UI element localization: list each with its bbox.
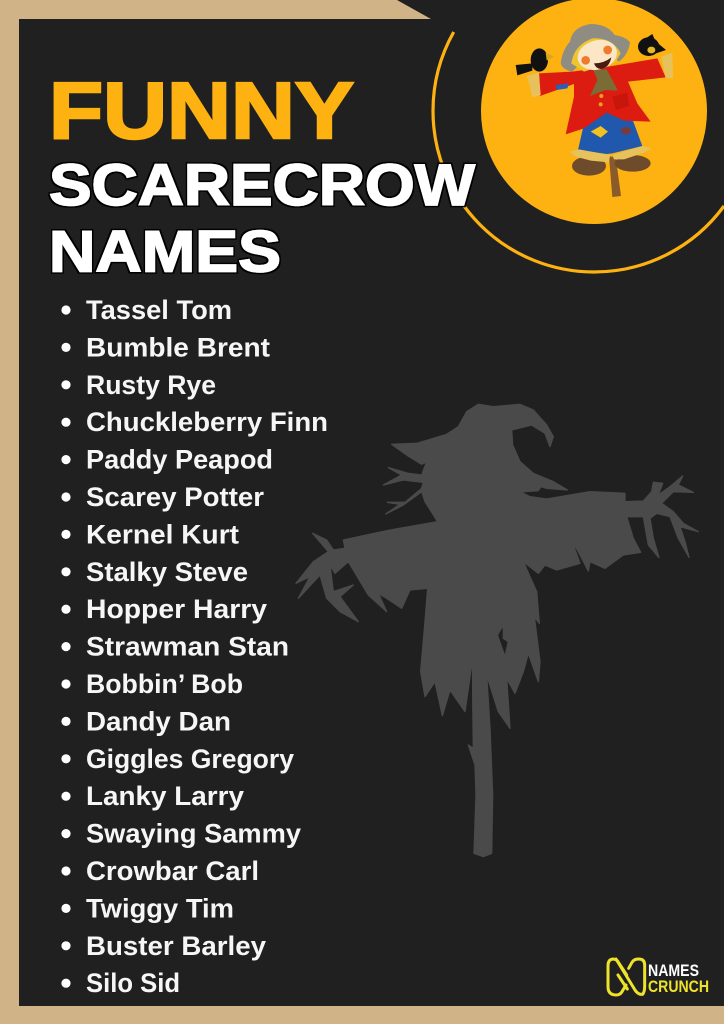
title bbox=[49, 66, 475, 284]
logo: Names Crunch bbox=[608, 959, 709, 996]
logo: Names Crunch: CRUNCH bbox=[648, 977, 709, 996]
title word: FUNNY: FUNNY bbox=[49, 66, 354, 155]
names list: Twiggy Tim bbox=[86, 893, 234, 923]
names list bbox=[61, 295, 328, 998]
names list: Chuckleberry Finn bbox=[86, 407, 328, 437]
scarecrow silhouette bbox=[296, 404, 698, 857]
names list: Strawman Stan bbox=[86, 632, 289, 662]
list bullets bbox=[61, 305, 71, 988]
names list: Scarey Potter bbox=[86, 482, 264, 512]
names list: Bumble Brent bbox=[86, 332, 270, 362]
names list: Swaying Sammy bbox=[86, 819, 301, 849]
logo wordmark: NAMES bbox=[648, 961, 699, 980]
names list: Lanky Larry bbox=[86, 781, 244, 811]
title word: NAMES: NAMES bbox=[49, 220, 281, 284]
title word: SCARECROW: SCARECROW bbox=[49, 153, 475, 218]
orange circle with scarecrow bbox=[481, 0, 707, 224]
icon: cartoon scarecrow bbox=[516, 24, 673, 197]
names list: Hopper Harry bbox=[86, 594, 267, 624]
names list: Rusty Rye bbox=[86, 370, 216, 400]
names list: Crowbar Carl bbox=[86, 856, 259, 886]
names list: Bobbin’ Bob bbox=[86, 669, 243, 699]
names list: Dandy Dan bbox=[86, 706, 231, 736]
names list: Kernel Kurt bbox=[86, 519, 239, 549]
icon: N logo mark bbox=[608, 959, 645, 995]
names list: Silo Sid bbox=[86, 968, 180, 998]
names list: Buster Barley bbox=[86, 931, 266, 961]
names list: Paddy Peapod bbox=[86, 445, 273, 475]
names list: Tassel Tom bbox=[86, 295, 232, 325]
orange ring arc bbox=[433, 32, 724, 272]
names list: Stalky Steve bbox=[86, 557, 248, 587]
names list: Giggles Gregory bbox=[86, 744, 294, 774]
